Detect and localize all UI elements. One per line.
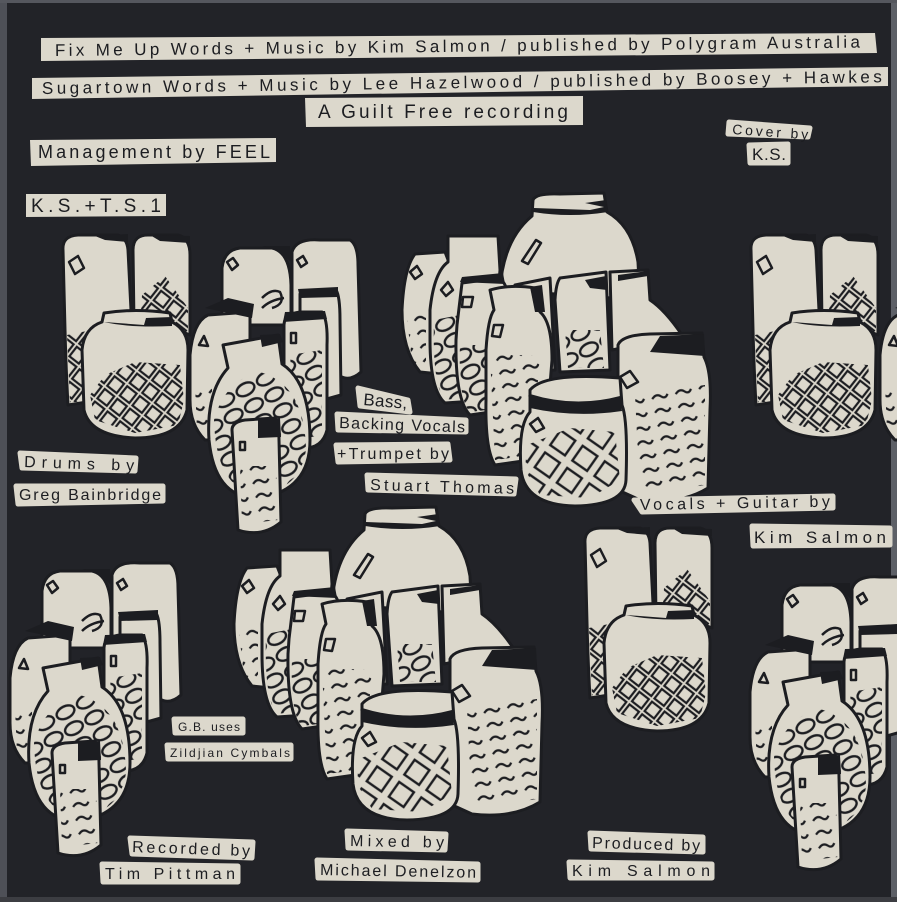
credit: produced: Kim Salmon xyxy=(572,863,710,880)
credit: mixed: Mixed by xyxy=(350,833,444,852)
credit: cymbals xyxy=(167,719,291,760)
credit: bass, vocals, trumpet: +Trumpet by xyxy=(337,446,449,463)
credit strip: Sugartown: Sugartown Words + Music by Lee Hazelwood / published by Boosey + Hawkes xyxy=(42,67,882,98)
credit: recorded: Tim Pittman xyxy=(105,866,235,883)
jar group: bottom left xyxy=(10,563,181,856)
credit: recorded xyxy=(102,838,253,883)
catalogue number: K.S.+T.S.1 xyxy=(31,196,161,217)
jar group: bottom centre xyxy=(234,507,542,820)
credit: bass, vocals, trumpet xyxy=(336,388,516,498)
credit: produced: Produced by xyxy=(592,835,700,855)
jar group: top left square jars xyxy=(63,234,190,438)
credit: bass, vocals, trumpet: Bass, xyxy=(363,390,408,413)
credit: vocals and guitar: Kim Salmon xyxy=(754,528,886,547)
credit: vocals and guitar: Vocals + Guitar by xyxy=(640,494,830,514)
credit: cover by: Cover by xyxy=(732,121,809,142)
jar group: centre right xyxy=(585,527,712,731)
credit: drums: Greg Bainbridge xyxy=(19,487,161,504)
credit: cymbals: G.B. uses xyxy=(178,720,240,734)
credit: bass, vocals, trumpet: Stuart Thomas xyxy=(370,477,514,498)
credit strip: management xyxy=(30,138,276,166)
credit: vocals and guitar xyxy=(634,494,890,547)
credit: produced xyxy=(569,833,712,880)
credit: cover by xyxy=(728,121,810,164)
jar group: top centre xyxy=(402,193,710,506)
credit strip: Guilt Free: A Guilt Free recording xyxy=(318,102,568,123)
credit: drums xyxy=(16,453,163,504)
credit: cover by: K.S. xyxy=(752,145,786,164)
jar group: top right xyxy=(751,234,878,438)
jar group: bottom right xyxy=(750,577,897,870)
credit: mixed: Michael Denelzon xyxy=(320,862,476,882)
credit strip: Guilt Free xyxy=(305,96,583,127)
credit: mixed xyxy=(317,831,478,882)
credit: cymbals: Zildjian Cymbals xyxy=(170,746,290,760)
jar group: top left round jars xyxy=(190,240,361,533)
jar group: top right edge xyxy=(880,240,897,533)
credit strip: management: Management by FEEL xyxy=(38,142,270,162)
credit: recorded: Recorded by xyxy=(132,839,250,860)
credit: drums: Drums by xyxy=(24,454,134,475)
credit: bass, vocals, trumpet: Backing Vocals xyxy=(339,415,465,436)
credit strip: Fix Me Up: Fix Me Up Words + Music by Kim Salmon / published by Polygram Australia xyxy=(55,33,861,60)
